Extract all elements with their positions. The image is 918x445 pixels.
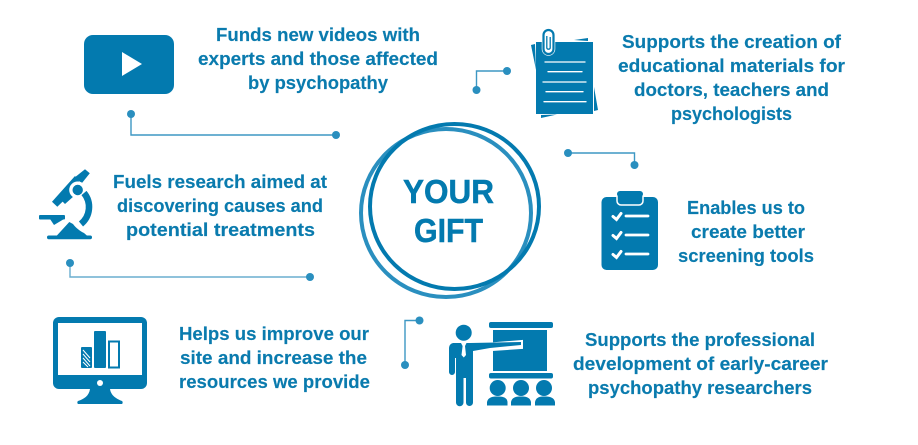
icon: video play button [84,35,174,94]
text: improve our site: resources we provide [179,371,370,392]
text: professional development: psychopathy researchers [588,377,812,398]
text: improve our site [179,323,370,392]
icon: microscope [39,169,92,239]
text: funds new videos [198,24,438,93]
text: funds new videos: by psychopathy [248,72,389,93]
text: educational materials: Supports the creation of [622,31,842,52]
text: improve our site: site and increase the [180,347,367,368]
text: improve our site: Helps us improve our [179,323,369,344]
icon: monitor with bar chart [53,317,147,404]
text: professional development [573,329,828,398]
connector: microscope to centre [66,259,314,281]
connector: centre to presenter [401,316,424,369]
central circle: your gift: GIFT [414,212,483,249]
text: funds new videos: experts and those affected [198,48,438,69]
icon: clipboard checklist [602,191,658,270]
text: fuels research [113,171,327,240]
text: fuels research: potential treatments [126,219,315,240]
connector: centre to clipboard [564,149,638,169]
text: screening tools: create better [691,221,805,242]
central circle: your gift [361,124,539,297]
text: educational materials: educational materials for [618,55,845,76]
text: screening tools: Enables us to [687,197,805,218]
text: professional development: Supports the professional [585,329,815,350]
icon: documents with paperclip [531,30,598,118]
text: educational materials: psychologists [671,103,792,124]
text: educational materials: doctors, teachers and [634,79,829,100]
text: screening tools: screening tools [678,245,814,266]
text: funds new videos: Funds new videos with [216,24,420,45]
text: professional development: development of early-career [573,353,828,374]
connector: video to centre [127,110,340,139]
text: fuels research: discovering causes and [117,195,323,216]
icon: presenter with audience [449,322,555,406]
text: educational materials [618,31,845,124]
connector: documents to centre [472,67,511,94]
text: screening tools [678,197,814,266]
central circle: your gift: YOUR [403,173,494,210]
text: fuels research: Fuels research aimed at [113,171,327,192]
